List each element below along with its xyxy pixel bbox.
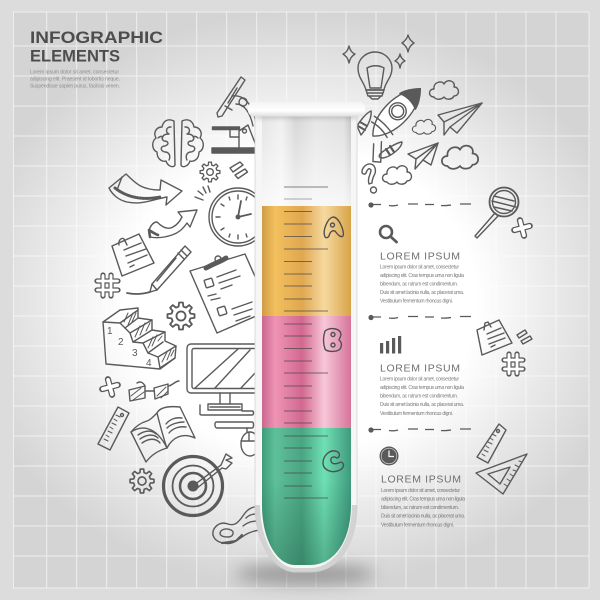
icon: numbered steps: 2 [118,337,124,348]
icon: rays [195,186,210,200]
icon: microscope [212,77,257,153]
icon: plus [100,377,120,397]
text block A: LOREM IPSUM [380,250,460,262]
text block B: Vestibulum fermentum rhoncus digni. [380,411,453,417]
letter C [323,451,344,472]
icon: search [380,226,396,242]
icon: clock badge [380,446,398,466]
icon: target with arrow [164,454,232,516]
liquid: green [262,428,351,565]
intro text: Suspendisse sapien purus, facilisis venen. [30,84,120,90]
test tube [248,102,365,572]
icon: light bulb [358,52,392,99]
text block B: bibendum, ac rutrum est condimentum. [380,394,458,400]
text block C: Lorem ipsum dolor sit amet, consectetur [381,488,460,494]
doodles: right side [343,35,532,494]
empty section [262,116,351,206]
icon: numbered steps: 4 [146,358,152,369]
icon: small paper plane [408,143,438,169]
text block B: adipiscing elit. Cras tempus urna non ligula [380,385,464,391]
liquid: pink [262,316,351,428]
intro text: adipiscing elit. Praesent id lobortis neque. [30,76,120,82]
icon: note [477,320,512,355]
text block C: Duis sit amet lacinia nulla, ac placerat urna. [381,514,465,520]
shadow under tube [235,564,375,584]
text block B [380,362,464,417]
letter B [324,329,341,351]
text block B: Duis sit amet lacinia nulla, ac placerat urna. [380,402,464,408]
icon: rocket [351,79,437,166]
text block A [380,250,464,304]
icon: monitor [187,344,262,456]
title: ELEMENTS [30,46,120,66]
icon: gear [167,302,195,330]
connector: dashed line B [368,315,471,320]
text block A: adipiscing elit. Cras tempus urna non ligula [380,273,464,279]
icon: infinity ribbon [213,507,260,543]
icon: gear [130,469,154,493]
icon: numbered steps [103,308,176,369]
icon: bars [517,330,532,344]
icon: clipboard [190,254,270,333]
icon: cloud [442,146,478,169]
title [30,28,163,66]
icon: plus [512,218,532,238]
icon: numbered steps: 3 [132,348,138,359]
intro text: Lorem ipsum dolor sit amet, consectetur [30,70,119,76]
icon: numbered steps: 1 [107,326,113,337]
icon: curved arrow [149,210,197,238]
text block A: Lorem ipsum dolor sit amet, consectetur [380,264,459,270]
text block A: bibendum, ac rutrum est condimentum. [380,282,458,288]
tube glass body [255,110,357,572]
tube rim [248,102,365,119]
icon: cloud [412,119,436,134]
icon: hash [97,275,118,296]
icon: cloud [430,81,458,99]
text block B: Lorem ipsum dolor sit amet, consectetur [380,376,459,382]
icon: ruler [477,424,506,463]
icon: bar chart [380,336,401,354]
doodles: left side [97,77,270,543]
icon: glasses [129,381,179,401]
text block C: adipiscing elit. Cras tempus urna non ligula [381,496,465,502]
liquid: yellow [262,206,351,316]
icon: sparkle [402,35,414,52]
letter A [324,217,343,238]
text block C [381,474,465,528]
icon: book [131,407,195,462]
icon: sparkle [395,54,405,68]
text block C: LOREM IPSUM [381,474,461,486]
icon: brain [153,120,203,167]
icon: cloud [382,166,412,184]
connector: dashed line C [368,427,471,433]
icon: magnifier [475,188,518,238]
scale ticks [284,187,328,498]
icon: paper plane [438,103,482,135]
text block C: Vestibulum fermentum rhoncus digni. [381,522,454,528]
text block A: Duis sit amet lacinia nulla, ac placerat urna. [380,290,464,296]
icon: sticky note [112,234,154,276]
icon: gear [200,162,220,182]
icon: sparkle [343,46,355,63]
connector: dashed line A [368,202,471,208]
icon: pencil [127,246,191,294]
text block B: LOREM IPSUM [380,362,460,374]
icon: hash [504,354,523,374]
intro text [30,70,120,90]
icon: ribbon arrow [109,174,182,205]
title: INFOGRAPHIC [30,28,163,47]
icon: clock [209,188,267,246]
icon: ruler [98,407,129,450]
text block A: Vestibulum fermentum rhoncus digni. [380,298,453,304]
icon: question mark [362,164,376,193]
icon: set square [476,454,527,494]
text block C: bibendum, ac rutrum est condimentum. [381,505,459,511]
icon: bars [230,162,248,178]
